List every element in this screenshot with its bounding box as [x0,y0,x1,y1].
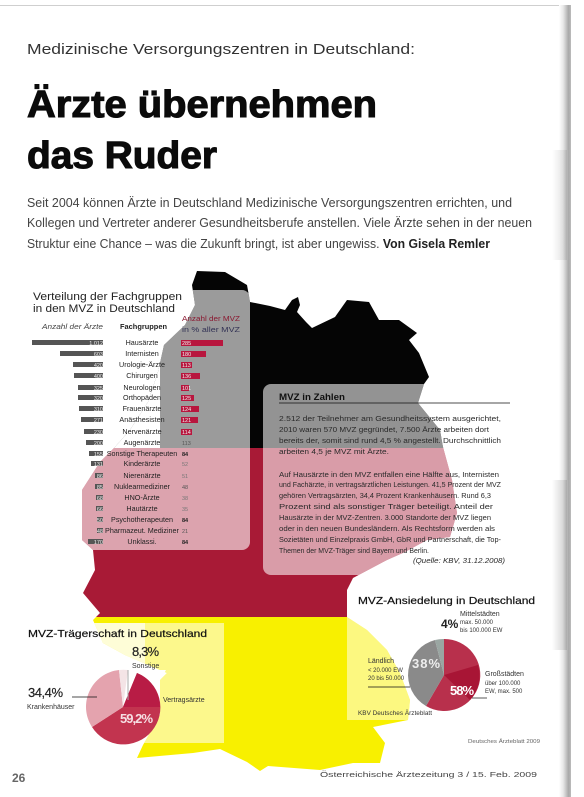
doctor counts: 420 [94,363,103,369]
column headers: Fachgruppen [120,324,167,331]
doctor counts: 48 [97,529,103,535]
MVZ counts: 121 [182,418,191,424]
panel heading: MVZ in Zahlen [279,392,345,403]
translucent panel behind sponsorship pie [90,623,224,743]
translucent panel behind MVZ facts [263,384,457,575]
panel text: Auf Hausärzte in den MVZ entfallen eine Hälfte aus, Internisten [279,472,499,479]
pie labels: Vertragsärzte [163,697,205,704]
specialist group labels: Nuklearmediziner [114,482,171,491]
pie labels: 20 bis 50.000 [368,676,405,682]
specialist group labels: Psychotherapeuten [111,515,173,524]
pie labels: Mittelstädten [460,611,500,618]
doctor counts: 131 [94,462,103,468]
panel text: bereits der, somit sind rund 4,5 % angestellt. Durchschnittlich [279,438,501,445]
doctor counts: 325 [94,386,103,392]
doctor counts: 230 [94,430,103,436]
column headers: in % aller MVZ [182,327,241,334]
pie labels: EW, max. 500 [485,689,523,695]
chart: distribution of specialist groups [32,291,241,546]
pie labels [27,663,205,711]
title: das Ruder [27,135,217,177]
pie labels [358,611,540,745]
doctor counts: 66 [97,507,103,513]
pie labels: Deutsches Ärzteblatt 2009 [468,738,540,745]
chart: MVZ-Trägerschaft pie [27,628,207,744]
MVZ counts: 21 [182,529,188,535]
doctor counts: 85 [97,485,103,491]
MVZ counts: 51 [182,474,188,480]
pie labels: Sonstige [132,663,159,670]
doctor counts: 86 [97,474,103,480]
panel text: Prozent sind als sonstiger Träger beteiligt. Anteil der [279,504,494,511]
column headers [41,316,241,334]
specialist group labels [105,338,180,546]
white ground around pie [88,670,166,700]
MVZ counts: 84 [182,518,189,524]
specialist group labels: Chirurgen [126,371,158,380]
chart: MVZ-Ansiedelung pie [358,595,540,745]
MVZ counts: 113 [182,363,191,369]
intro paragraph: Struktur eine Chance – was die Zukunft bringt, ist aber ungewiss. Von Gisela Remler [27,237,490,251]
title: Ärzte übernehmen [27,83,377,126]
pie [86,670,160,744]
specialist group labels: Anästhesisten [119,415,165,424]
panel: MVZ in Zahlen [279,392,510,565]
panel text [279,416,505,565]
pie labels: max. 50.000 [460,620,494,626]
chart heading: Verteilung der Fachgruppen [33,291,182,303]
chart: MVZ-Trägerschaft pie: 8,3% [132,644,159,659]
MVZ counts: 124 [182,407,191,413]
pie labels: KBV Deutsches Ärzteblatt [358,710,432,717]
doctor counts: 68 [97,496,103,502]
specialist group labels: Urologie-Ärzte [119,360,165,369]
left bars: number of doctors [32,340,103,544]
doctor counts: 1.012 [89,341,103,347]
panel text: und Fachärzte, in vertragsärztlichen Leistungen. 41,5 Prozent der MVZ [279,482,502,489]
doctor counts [89,341,103,546]
map of Germany in flag colours [82,271,457,771]
page number: 26 [12,771,26,785]
title [27,83,377,177]
panel text: Sozietäten und Einzelpraxis GmbH, GbR und Partnerschaft, die Top- [279,537,502,544]
doctor counts: 155 [94,452,103,458]
MVZ counts: 136 [182,374,191,380]
pie [408,639,480,711]
pie values: 38% [412,656,440,671]
MVZ counts: 84 [182,540,189,546]
panel text: 2010 waren 570 MVZ gegründet, 7.500 Ärzte arbeiten dort [279,426,489,434]
column headers: Anzahl der Ärzte [41,323,103,331]
MVZ counts [182,341,191,546]
pie labels: Ländlich [368,658,394,665]
footer source line: Österreichische Ärztezeitung 3 / 15. Feb. 2009 [320,770,537,779]
MVZ counts: 114 [182,430,191,436]
translucent panel behind distribution chart [82,290,250,550]
chart heading: in den MVZ in Deutschland [33,303,175,315]
MVZ counts: 84 [182,452,189,458]
leader line [72,696,97,698]
pie labels: über 100.000 [485,681,521,687]
doctor counts: 400 [94,374,103,380]
MVZ counts: 52 [182,462,188,468]
intro paragraph [27,196,532,251]
MVZ counts: 35 [182,507,188,513]
MVZ counts: 285 [182,341,191,347]
panel text: oder in den neuen Bundesländern. Als Rechtsform werden als [279,526,496,533]
pie labels: Krankenhäuser [27,704,75,711]
pie labels: Großstädten [485,671,524,678]
specialist group labels: Nierenärzte [123,471,161,480]
chart: MVZ-Ansiedelung pie: 58% [450,683,474,698]
leader lines [368,687,487,698]
specialist group labels: Hausärzte [126,338,158,347]
specialist group labels: Augenärzte [124,438,160,447]
panel text: arbeiten 4,5 je MVZ mit Ärzte. [279,448,389,456]
specialist group labels: Hautärzte [126,504,158,513]
pie values: 59,2% [120,711,153,726]
panel text: (Quelle: KBV, 31.12.2008) [413,558,505,565]
MVZ counts: 113 [182,441,191,447]
chart heading: MVZ-Trägerschaft in Deutschland [28,628,207,640]
specialist group labels: Unklassi. [127,537,157,546]
MVZ counts: 48 [182,485,188,491]
right bars: number of MVZ [181,340,223,435]
chart: MVZ-Trägerschaft pie: 34,4% [28,685,63,700]
chart heading [33,291,182,315]
doctor counts: 200 [94,441,103,447]
MVZ counts: 38 [182,496,188,502]
chart heading: MVZ-Ansiedelung in Deutschland [358,595,535,607]
specialist group labels: Frauenärzte [123,404,161,413]
MVZ counts: 125 [182,396,191,402]
column headers: Anzahl der MVZ [182,316,241,323]
specialist group labels: Kinderärzte [124,459,160,468]
panel text: 2.512 der Teilnehmer am Gesundheitssystem ausgerichtet, [279,416,501,423]
panel text: Hausärzte in der MVZ-Zentren. 3.000 Standorte der MVZ liegen [279,515,491,522]
panel text: Themen der MVZ-Träger sind Bayern und Berlin. [279,548,429,555]
doctor counts: 320 [94,396,103,402]
doctor counts: 50 [97,518,103,524]
specialist group labels: Orthopäden [123,393,161,402]
doctor counts: 603 [94,352,103,358]
chart: MVZ-Ansiedelung pie: 4% [441,617,459,631]
doctor counts: 170 [94,540,103,546]
specialist group labels: Sonstige Therapeuten [107,449,177,458]
specialist group labels: Internisten [125,349,159,358]
specialist group labels: HNO-Ärzte [124,493,160,502]
panel text: gehören Vertragsärzten, 34,4 Prozent Krankenhäusern. Rund 6,3 [279,493,491,500]
MVZ counts: 101 [182,386,191,392]
pie labels: bis 100.000 EW [460,628,503,634]
doctor counts: 310 [94,407,103,413]
kicker heading: Medizinische Versorgungszentren in Deutschland: [27,41,415,58]
specialist group labels: Neurologen [123,383,161,392]
pie labels: < 20.000 EW [368,668,403,674]
intro paragraph: Seit 2004 können Ärzte in Deutschland Medizinische Versorgungszentren errichten, und [27,196,512,210]
specialist group labels: Nervenärzte [122,427,162,436]
intro paragraph: Kollegen und Vertreter anderer Gesundheitsberufe anstellen. Viele Ärzte sehen in der neuen [27,216,532,230]
translucent panel behind location pie [347,617,417,720]
MVZ counts: 180 [182,352,191,358]
specialist group labels: Pharmazeut. Mediziner [105,526,180,535]
doctor counts: 271 [94,418,103,424]
